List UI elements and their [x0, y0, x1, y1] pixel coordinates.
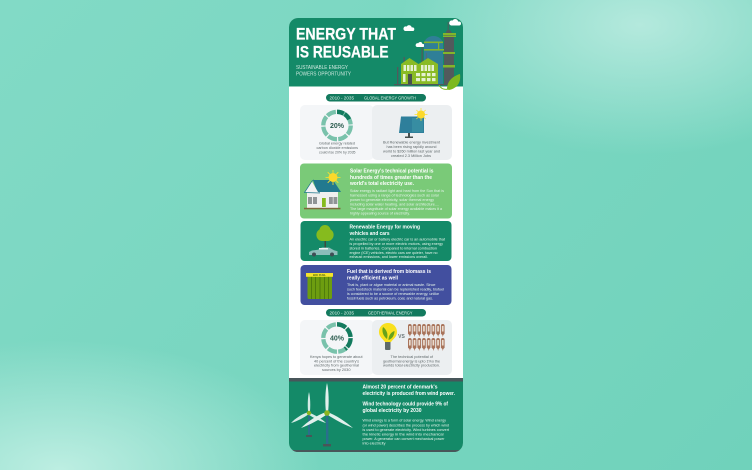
icon: green factory and towers: [394, 22, 460, 90]
icon: house with sun: [304, 170, 341, 209]
section pill: geothermal energy: 2010 - 2035: [330, 311, 355, 316]
caption: carbon emissions: could rise 20% by 2035: [319, 150, 356, 154]
caption: investment: has been rising rapidly around: [386, 144, 436, 149]
caption: geothermal target: Kenya hopes to generate about: [310, 354, 363, 359]
text: vehicles: is propelled by one or more electric motors, using energy: [350, 241, 443, 246]
text: wind power: [362, 384, 455, 446]
text: wind power: into electricity: [362, 440, 386, 446]
caption: geothermal target: sources by 2030: [322, 367, 351, 372]
text: wind power: electricity is produced from wind power.: [362, 391, 455, 397]
caption: carbon emissions: carbon dioxide emissions: [316, 145, 358, 150]
donut chart: 40%: 40%: [330, 336, 345, 342]
icon: leaf light bulb: [379, 323, 397, 350]
caption: geothermal potential: worlds total electricity production.: [383, 363, 440, 368]
icon: bio fuel crop: [306, 273, 333, 299]
section pill: geothermal energy: [326, 309, 426, 316]
panel: carbon emissions 20%: [300, 105, 374, 160]
caption: investment: But Renewable energy investment: [383, 140, 441, 144]
text: vehicles: Renewable Energy for moving: [350, 224, 420, 230]
text: vehicles: [350, 224, 446, 259]
caption: geothermal potential: geothermal energy is upto 1%o the: [383, 358, 441, 363]
title: ENERGY THAT: [296, 26, 396, 44]
text: solar potential: power to generate electricity, solar thermal energy: [350, 197, 434, 202]
text: solar potential: [349, 168, 444, 216]
text: solar potential: Solar Energy's technical potential is: [350, 168, 434, 174]
text: solar potential: Solar energy is radiant light and heat from the Sun that is: [350, 188, 444, 193]
donut chart: 20%: 20%: [330, 123, 345, 130]
text: solar potential: The large magnitude of solar energy available makes it a: [350, 206, 443, 211]
section pill: geothermal energy: GEOTHERMAL ENERGY: [368, 311, 413, 316]
caption: geothermal target: 40 percent of the country's: [314, 358, 359, 364]
caption: carbon emissions: Global energy related: [319, 140, 355, 146]
text: vehicles: exhaust emissions, and lower emissions overall.: [350, 254, 428, 259]
text: biomass: fossil fuels such as petroleum, coal, and natural gas.: [347, 296, 433, 300]
section pill: global energy growth: GLOBAL ENERGY GROWTH: [364, 96, 416, 101]
text: biomass: really efficient as well: [347, 276, 398, 282]
caption: geothermal target: electricity from geothermal: [314, 362, 359, 368]
caption: carbon emissions: [316, 140, 358, 154]
icon: solar panel with sun: [399, 108, 428, 138]
panel: geothermal 40%: [300, 320, 374, 375]
text: solar potential: hundreds of times greater than the: [350, 175, 433, 181]
caption: geothermal potential: The technical potential of: [390, 354, 434, 359]
caption: geothermal target: [310, 354, 363, 372]
title: IS REUSABLE: [296, 44, 388, 62]
subtitle: SUSTAINABLE ENERGY: [296, 65, 348, 71]
text: vehicles: engine (ICE) vehicles, electric cars are quieter, have no: [350, 250, 438, 255]
infographic page: [289, 18, 463, 452]
text: wind power: Wind energy is a form of solar energy. Wind energy: [362, 418, 446, 423]
icon: clouds: [403, 19, 461, 47]
text: biomass: [347, 269, 444, 300]
caption: investment: created 2.3 Million Jobs: [391, 153, 431, 158]
panel: wind power: [289, 378, 463, 452]
icon: tree and electric car: [309, 225, 338, 256]
panel: geothermal potential: [372, 320, 452, 375]
section pill: global energy growth: [326, 94, 426, 102]
text: solar potential: world's total electricity use.: [349, 181, 414, 187]
text: wind power: is used to generate electricity. Wind turbines convert: [362, 427, 450, 432]
text: vehicles: stored in batteries. Compared to internal combustion: [350, 246, 437, 250]
text: wind power: power. A generator can convert mechanical power: [362, 436, 445, 441]
panel: solar energy: [300, 164, 452, 218]
header and white card background: [289, 18, 463, 452]
section pill: global energy growth: 2010 - 2035: [330, 96, 355, 101]
icon: wind turbines: [291, 383, 353, 446]
panel: vehicles: [300, 221, 452, 261]
panel: renewable investment: [372, 105, 452, 160]
text: biomass: Fuel that is derived from biomass is: [347, 269, 432, 275]
text: wind power: global electricity by 2030: [362, 408, 422, 414]
label: versus: VS: [398, 334, 405, 340]
text: vehicles: An electric car or battery electric car is an automobile that: [350, 236, 446, 242]
subtitle: POWERS OPPORTUNITY: [296, 72, 351, 78]
text: solar potential: including solar water heating, and solar architecture....: [350, 202, 439, 206]
text: biomass: such feedstock material can be replenished readily, biofuel: [347, 286, 444, 292]
subtitle: [296, 65, 351, 78]
text: solar potential: highly appealing source of electricity.: [350, 210, 410, 216]
text: biomass: That is, plant or algae material or animal waste. Since: [347, 282, 436, 287]
panel: biomass fuel: [300, 265, 452, 305]
caption: investment: [383, 140, 441, 158]
text: wind power: Almost 20 percent of denmark's: [362, 384, 438, 390]
caption: geothermal potential: [383, 354, 441, 368]
caption: investment: world to $260 million last year and: [383, 148, 440, 154]
text: vehicles: vehicles and cars: [350, 231, 390, 237]
title: [296, 26, 396, 62]
text: biomass: is considered to be a source of renewable energy, unlike: [347, 291, 440, 296]
text: wind power: the kinetic energy in the wind into mechanical: [362, 432, 444, 436]
text: wind power: (or wind power) describes the process by which wind: [362, 422, 449, 428]
text: solar potential: harnessed using a range of technologies such as solar: [350, 192, 440, 198]
icon: geothermal wells grid: [408, 324, 445, 351]
icon: bio fuel crop: BIO FUEL: [313, 273, 326, 277]
text: wind power: Wind technology could provide 9% of: [362, 402, 448, 408]
